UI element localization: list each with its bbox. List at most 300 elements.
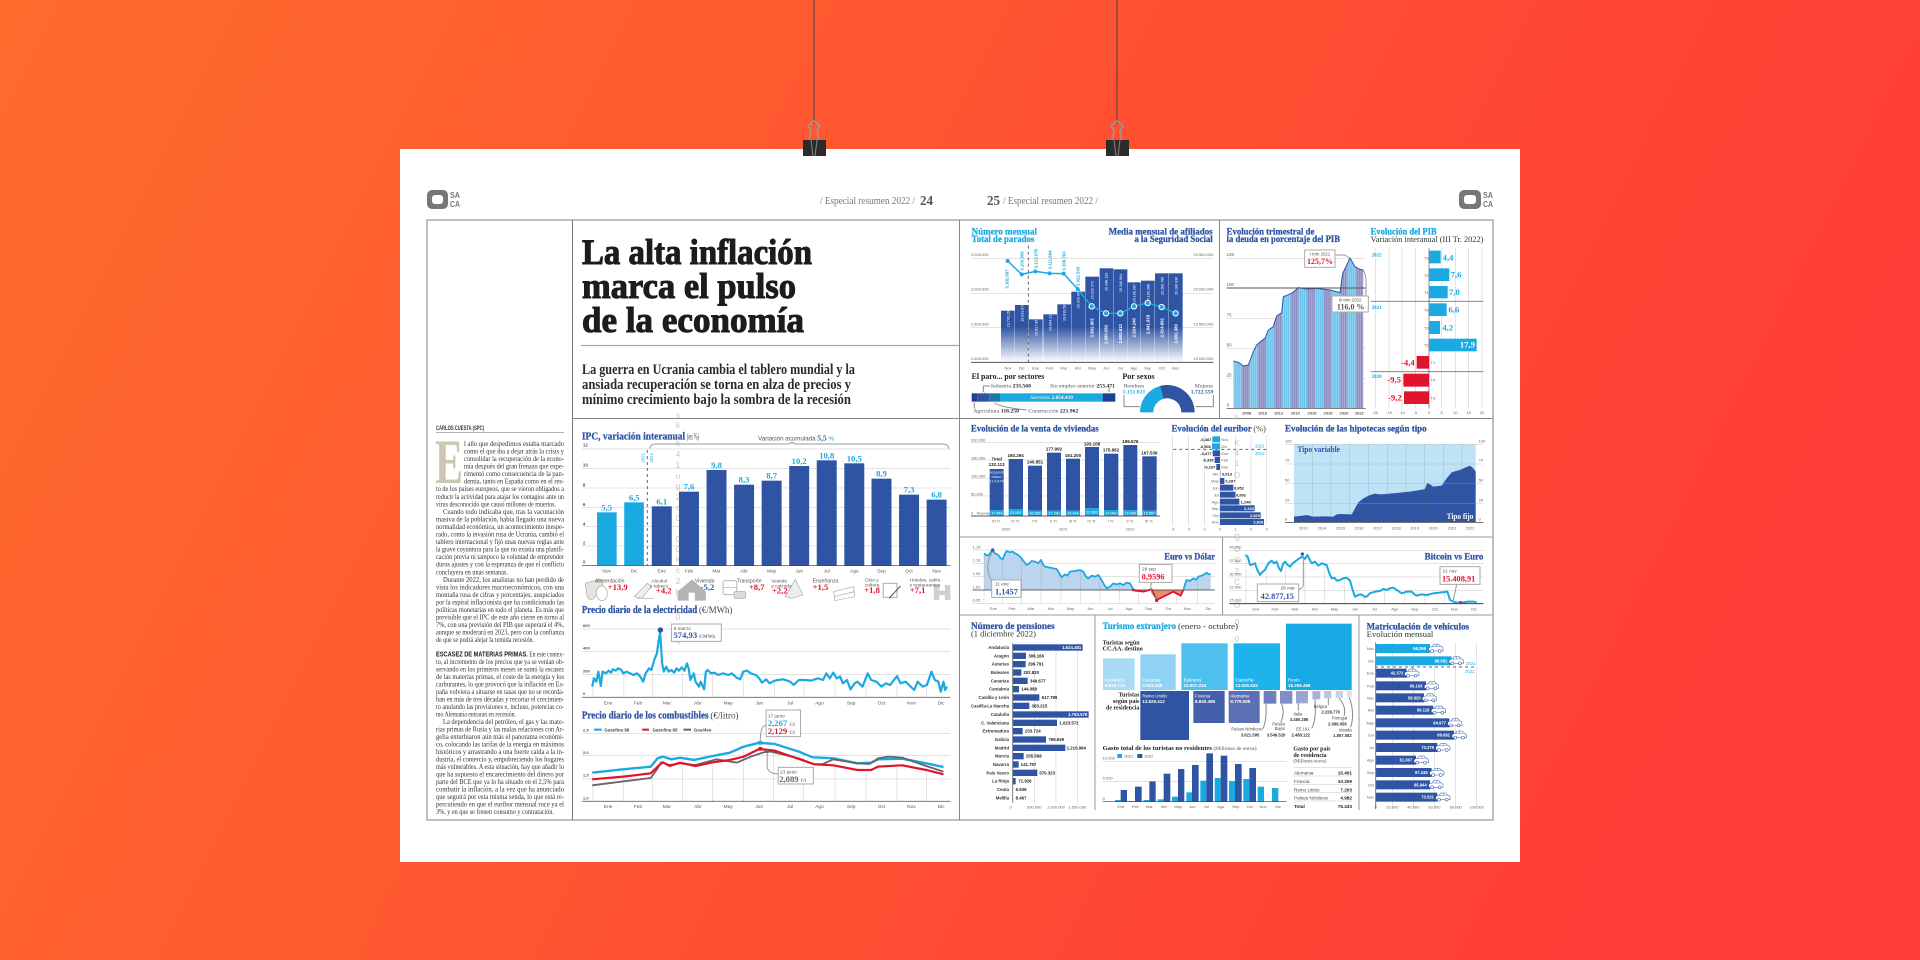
bar chart: PIB: 2020	[1372, 375, 1382, 380]
chart: bitcoin vs euro: Dic	[1471, 606, 1477, 611]
month labels: Jun	[1103, 365, 1110, 370]
heading: pensiones: Número de pensiones	[971, 622, 1055, 632]
callout: 17 junio	[759, 710, 801, 751]
line values: parados: 2.941.919	[1145, 314, 1150, 334]
bar values: afiliados: 20.020.000	[1076, 290, 1080, 308]
subtitle	[582, 362, 856, 408]
treemap: país de residencia: Francia	[1195, 693, 1210, 698]
article text	[436, 439, 565, 816]
month labels: Ene	[1367, 671, 1375, 676]
chart: euro vs dólar: 1,15	[973, 544, 981, 549]
line values: parados: 3.123.078	[1033, 248, 1038, 268]
treemap: país de residencia: 2.096.056	[1328, 721, 1347, 726]
heading: PIB	[1371, 226, 1483, 244]
bar chart: PIB: 2021	[1372, 306, 1382, 311]
fuel grid and labels: 2,0	[583, 750, 589, 755]
bar chart: viviendas: mano	[992, 474, 1002, 479]
chart: paro por sexos: 1.722.559	[1191, 390, 1214, 396]
chart: euro vs dólar: Jul	[1107, 606, 1113, 611]
fuel grid and labels: Dic	[938, 804, 945, 810]
month labels: Oct	[1159, 365, 1166, 370]
treemap: CCAA destino: 9.923.288	[1142, 683, 1163, 688]
stray letter columns: k	[676, 439, 681, 448]
byline: CARLOS CUESTA (SPC)	[436, 425, 484, 432]
bar values: 66.399	[1413, 646, 1427, 651]
area chart: hipotecas: 2020	[1429, 525, 1439, 530]
line values: parados: 2.902.901	[1089, 317, 1094, 337]
article text: políticas monetarias en todo el planeta. Es más que	[436, 605, 565, 614]
month labels: Feb	[1046, 365, 1054, 370]
callout: III trim 2022: III trim 2022	[1339, 297, 1362, 302]
bar chart: euríbor: Nov	[1221, 437, 1228, 442]
axis labels: 1.500.000	[1068, 805, 1087, 810]
bar chart: euríbor: 2022	[1255, 451, 1265, 456]
treemap: país de residencia: EE.UU.	[1296, 727, 1310, 732]
bar values: 84.977	[1433, 720, 1447, 725]
bar values: afiliados: 19.627.851	[1034, 318, 1038, 336]
panel: combustibles	[582, 710, 950, 810]
chart: euro vs dólar: Ene	[990, 606, 998, 611]
bar chart: viviendas	[971, 438, 1160, 531]
article text: previsible que el IPC de este año cierre en torno al	[436, 613, 564, 622]
pension values: 617.789	[1042, 695, 1058, 700]
fuel grid and labels: Oct	[878, 804, 886, 810]
area chart: deuda: 125	[1227, 252, 1234, 257]
chart: bitcoin vs euro: Nov	[1451, 606, 1458, 611]
article text: normalidad económica, un acontecimiento inespe-	[436, 522, 564, 531]
region labels	[971, 645, 1010, 800]
icon: hoteles: y restaurantes	[910, 583, 941, 589]
drop cap: E	[435, 426, 463, 497]
stray letter columns: O	[1234, 471, 1240, 480]
area chart: hipotecas: 2017	[1373, 525, 1383, 530]
month labels: Jul	[1118, 365, 1123, 370]
panel: pensiones: 1.624.481	[1062, 645, 1082, 650]
grid and axes	[971, 252, 1214, 362]
bar values: 42.372	[1391, 671, 1404, 676]
area chart: deuda: 100	[1227, 282, 1234, 287]
bar chart: gasto total: (Millones de euros)	[1213, 745, 1257, 752]
region labels: Ceuta	[997, 787, 1010, 792]
fuel grid and labels: Sep	[847, 804, 856, 810]
title: de la economía	[582, 300, 804, 340]
icon: hoteles: Hoteles, cafés	[910, 578, 941, 584]
bar chart: euríbor: -0,237	[1204, 465, 1216, 470]
callout: 23 junio: 23 junio	[780, 770, 797, 776]
icon row: CPI components	[585, 578, 950, 601]
pension values: 349.677	[1030, 678, 1046, 683]
bar chart: PIB: T2	[1424, 273, 1429, 278]
month labels	[1366, 646, 1375, 800]
axis labels: 40.000	[1407, 805, 1420, 810]
bar chart: gasto total	[1103, 745, 1287, 809]
bar chart: viviendas: 2021	[1059, 526, 1069, 531]
stray letter columns: C	[1234, 578, 1240, 587]
panel: turismo	[1103, 621, 1353, 809]
bar chart: viviendas: 167.539	[1141, 450, 1158, 455]
region labels: Asturias	[992, 662, 1010, 667]
chart: euro vs dólar	[973, 544, 1215, 611]
bar values: afiliados: 20.158.087	[1133, 284, 1137, 302]
bar values: 9,8	[711, 460, 722, 470]
callout: bitcoin máximo: 28 mar	[1280, 586, 1295, 591]
article text: rimentó como consecuencia de la pan-	[464, 469, 564, 478]
fuel grid and labels: 1,0	[583, 795, 589, 800]
stray letter columns: k	[676, 421, 681, 430]
y axis and grid: 8	[583, 483, 586, 488]
table: gasto por país: 15.401	[1338, 771, 1352, 776]
icon: alimentación	[585, 578, 628, 601]
heading: bitcoin: Bitcoin vs Euro	[1425, 551, 1484, 561]
region labels: Andalucía	[988, 645, 1010, 650]
article text: de que se podrá alejar la temida recesión.	[436, 635, 534, 644]
bar chart: viviendas: 16.065	[1029, 512, 1041, 516]
area chart: hipotecas: 25	[1285, 497, 1290, 502]
bar chart: viviendas: IV Tr.	[1087, 518, 1097, 523]
bar chart: gasto total: Gasto total de los turistas no residentes	[1103, 746, 1213, 752]
stray letter columns: c	[676, 503, 680, 512]
axis labels: 1.000.000	[1047, 805, 1066, 810]
icon: vivienda	[678, 578, 715, 601]
treemap: país de residencia: Irlanda	[1339, 727, 1352, 732]
bar chart: gasto total: Jul	[1204, 804, 1209, 809]
area chart: hipotecas: 2019	[1410, 525, 1420, 530]
chart: bitcoin vs euro: 37.500	[1229, 558, 1242, 563]
bar chart: viviendas: 2020	[1002, 526, 1011, 531]
bar values: afiliados: 20.286.836	[1174, 277, 1178, 295]
article text: reducir la actividad para atajar los contagios ante un	[436, 492, 564, 501]
article text: gelia enturbiaron aún más el panorama económi-	[436, 732, 564, 741]
chart: euro vs dólar: May	[1067, 606, 1074, 611]
month labels: Dic	[1019, 365, 1025, 370]
bar chart: PIB: T4	[1431, 378, 1436, 383]
bar values: 8,3	[739, 475, 749, 485]
article text: combatir la inflación, a la vez que ha anunciado	[436, 784, 564, 794]
bar chart: euríbor	[1171, 436, 1269, 532]
grid and axes: 3.000.000	[971, 287, 990, 292]
heading: viviendas: Evolución de la venta de viviendas	[971, 424, 1099, 434]
month labels: Ago	[850, 569, 859, 575]
bar chart: viviendas: 17.993	[1105, 511, 1117, 515]
callout: electricity peak: 574,93 €/MWh	[673, 630, 715, 640]
bar chart: gasto total: 5.000	[1103, 776, 1113, 781]
stray letter columns: 0	[1235, 635, 1240, 644]
bar chart: gasto total: Mar	[1146, 804, 1153, 809]
bar chart: PIB: T3	[1424, 325, 1429, 330]
bar chart: euríbor: May	[1211, 479, 1219, 484]
bar values: 8,7	[766, 471, 778, 481]
bar chart: PIB: 15	[1466, 410, 1472, 415]
electricity grid and labels: May	[724, 701, 733, 707]
treemap: país de residencia: 3.480.286	[1290, 717, 1309, 722]
icon: ocio y cultura: cultura	[865, 583, 880, 589]
heading: pensiones: (1 diciembre 2022)	[971, 629, 1036, 639]
month labels: Mar	[1061, 365, 1068, 370]
table: gasto por país: Países Nórdicos	[1294, 796, 1329, 801]
bar values: 60.103	[1410, 683, 1423, 688]
fuel grid and labels	[582, 727, 950, 810]
area chart: hipotecas: 100	[1285, 438, 1292, 443]
stray letter columns: O	[1234, 545, 1240, 554]
pension values: 308.166	[1028, 653, 1045, 658]
legend: years	[1117, 754, 1154, 759]
month labels: Sep	[877, 569, 886, 575]
region labels: Madrid	[995, 745, 1009, 750]
area chart: hipotecas: 2014	[1318, 525, 1327, 530]
bar chart: gasto total: Ene	[1117, 804, 1125, 809]
electricity grid and labels: Mar	[663, 701, 672, 707]
bar chart: euríbor: 0,287	[1225, 479, 1236, 484]
icon: vivienda: Vivienda	[695, 578, 715, 584]
bar chart: PIB: 7,6	[1451, 269, 1462, 279]
page frame and dividers	[427, 220, 1493, 820]
y axis and grid	[582, 443, 950, 566]
area chart: hipotecas	[1285, 438, 1486, 530]
article text: que seguirá por esta misma senda, lo que está re-	[436, 792, 564, 801]
article text: aunque se moderará en 2023, pero con la confianza	[436, 628, 565, 637]
month labels: Abr	[740, 569, 748, 575]
bar chart: viviendas: 22.883	[1086, 511, 1098, 515]
electricity grid and labels: Jul	[787, 701, 793, 707]
area chart: hipotecas: 2013	[1299, 525, 1309, 530]
chart: bitcoin vs euro: 15.000	[1229, 598, 1242, 603]
bar chart: PIB: 4,4	[1443, 252, 1454, 262]
page header left: 24	[920, 194, 933, 209]
stray letter columns: 0	[676, 545, 681, 554]
region labels: Cantabria	[989, 687, 1010, 692]
subtitle: ansiada recuperación se torna en alza de precios y	[582, 377, 852, 393]
month labels: Ene	[1032, 365, 1040, 370]
panel: IPC: (en %)	[687, 431, 699, 442]
callout: I trim 2021	[1305, 250, 1349, 267]
bar chart: euríbor: -1	[1203, 527, 1207, 532]
electricity grid and labels: Dic	[938, 701, 945, 707]
bar values: afiliados: 20.180.388	[1146, 284, 1150, 302]
heading: media mensual: Media mensual de afiliados	[1109, 226, 1213, 236]
bar chart: PIB: 0	[1428, 410, 1431, 415]
region labels: Melilla	[996, 795, 1010, 800]
grid	[1034, 643, 1077, 803]
stray letter columns: h	[676, 588, 680, 597]
stray letter columns: 2	[676, 493, 681, 502]
line chart: parados	[1006, 259, 1178, 316]
table: gasto por país: Reino Unido	[1294, 787, 1320, 792]
treemap: país de residencia: 2.488.122	[1291, 733, 1311, 738]
area chart: hipotecas: 100	[1479, 438, 1486, 443]
month labels: Abr	[1075, 365, 1082, 370]
axis labels: 80.000	[1450, 805, 1463, 810]
bar chart: viviendas: 132.113	[989, 462, 1005, 467]
bar chart: viviendas: 175.882	[1103, 448, 1120, 453]
article text: rado, como la invasión rusa de Ucrania, cambió el	[436, 530, 564, 538]
area chart: deuda: 25	[1227, 373, 1232, 378]
bar chart: euríbor: 2	[1250, 527, 1253, 532]
area chart: hipotecas: Tipo variable	[1297, 445, 1340, 454]
bar values: afiliados: 20.348.133	[1105, 273, 1109, 291]
bar values	[601, 450, 942, 512]
y axis and grid: 10	[583, 462, 588, 467]
treemap: país de residencia: Turistas	[1119, 693, 1140, 699]
chart: paro por sexos	[1122, 372, 1214, 412]
callout: 23 junio	[765, 750, 813, 784]
bar chart: gasto total: Jun	[1189, 804, 1196, 809]
bar values: 51.907	[1400, 758, 1413, 763]
region labels: Navarra	[993, 762, 1010, 767]
chart: euro vs dólar: 1,00	[973, 584, 981, 589]
treemap: CCAA destino: 18.256.499	[1288, 683, 1311, 688]
chart: euro vs dólar: Feb	[1009, 606, 1016, 611]
electricity grid and labels: Nov	[907, 701, 916, 707]
article text: dustria, el comercio y, empobreciendo los hogares	[436, 754, 564, 764]
article text: paña volviera a situarse en tasas que no se recorda-	[436, 687, 564, 696]
title: La alta inflación	[582, 232, 812, 272]
chart: bitcoin vs euro: Jul	[1372, 606, 1377, 611]
bar values: afiliados: 19.743.268	[1006, 309, 1010, 327]
month labels: Nov	[1367, 795, 1374, 800]
chart: euro vs dólar: Ago	[1125, 606, 1133, 611]
callout: I trim 2021: I trim 2021	[1310, 251, 1331, 256]
bar chart: viviendas: Segunda	[989, 470, 1005, 475]
area chart: hipotecas: 50	[1285, 478, 1290, 483]
treemap: país de residencia: 13.529.412	[1142, 699, 1165, 704]
bar values: 7,3	[904, 485, 914, 495]
chart: bitcoin vs euro: 45.000	[1229, 545, 1242, 550]
area chart: hipotecas: 0	[1479, 517, 1482, 522]
bar chart: euríbor: Jul	[1214, 492, 1219, 497]
bar chart: euríbor: Feb	[1221, 458, 1229, 463]
callout: 17 junio: 17 junio	[768, 713, 785, 719]
bar chart: PIB	[1371, 248, 1485, 415]
callout: bitcoin mínimo: 21 nov	[1443, 568, 1457, 573]
y axis and grid: 6	[583, 502, 586, 507]
pension values: 144.089	[1021, 687, 1038, 692]
bar values: 10,2	[792, 456, 807, 466]
fuel grid and labels: 1,5	[583, 773, 589, 778]
month labels	[1004, 365, 1179, 370]
icon: alcohol y tabaco: Alcohol	[651, 578, 667, 584]
callout: III trim 2022: 116,0 %	[1337, 303, 1364, 312]
article text: cación previa ni tampoco la voluntad de emprender	[436, 552, 564, 561]
region labels: C. Valenciana	[981, 720, 1010, 725]
treemap: CCAA destino: 6.818.714	[1105, 683, 1125, 688]
legend: fuels: Gasóleo	[694, 727, 712, 732]
callout: 23 junio: 2,089 €/l	[779, 774, 807, 784]
bar chart: euríbor: Ene	[1221, 451, 1229, 456]
article text: vista los indicadores macroeconómicos, con una	[436, 582, 565, 591]
heading: número mensual: Número mensual	[972, 226, 1037, 236]
chart: bitcoin vs euro: Abr	[1312, 606, 1319, 611]
icon: alimentación: Alimentación	[595, 578, 625, 584]
y axis and grid: 2	[583, 540, 586, 545]
article text: consolidar la recuperación de la econo-	[464, 454, 564, 463]
white paper sheet	[400, 149, 1520, 862]
month labels: Nov	[1367, 646, 1374, 651]
article text: mo Alemania entraran en recesión.	[436, 710, 516, 718]
line values: parados: 2.924.240	[1132, 317, 1137, 337]
chart: bitcoin vs euro: Mar	[1292, 606, 1299, 611]
bars: afiliados	[1001, 268, 1183, 362]
pension values: 1.023.572	[1059, 720, 1079, 725]
bar chart: matriculaciones	[1376, 644, 1454, 802]
grid and axes: 19.000.000	[1193, 356, 1214, 361]
grid and axes: 2.800.000	[971, 321, 990, 326]
bar chart: viviendas: 160.294	[1008, 453, 1024, 458]
electricity grid and labels: 200	[583, 668, 591, 673]
month labels: Feb	[685, 569, 693, 575]
heading: deuda: la deuda en porcentaje del PIB	[1227, 234, 1340, 244]
bar chart: euríbor: Jun	[1212, 485, 1219, 490]
bar chart: viviendas: IV Tr.	[1011, 518, 1020, 523]
bar chart: viviendas: 17.454	[991, 511, 1002, 515]
treemap: país de residencia: Reino Unido	[1142, 693, 1168, 698]
panel: vivienda, euríbor, euro	[971, 424, 1269, 611]
electricity grid and labels: Feb	[634, 701, 643, 707]
callout: electricity peak	[658, 624, 721, 641]
heading: euro vs dólar: Euro vs Dólar	[1164, 551, 1215, 561]
pension values: 6.938	[1016, 787, 1027, 792]
article text: mía después del gran frenazo que expe-	[464, 462, 564, 471]
chart: euro vs dólar: Nov	[1184, 606, 1191, 611]
page header right: 25	[987, 194, 1000, 209]
bar chart: euríbor: 2,629	[1250, 513, 1261, 518]
legend: fuels: Gasolina 95	[652, 727, 678, 732]
bar chart: PIB: -9,5	[1387, 375, 1402, 385]
region labels: Extremadura	[983, 729, 1010, 734]
bar values: afiliados: 20.340.964	[1119, 274, 1123, 292]
chart: bitcoin vs euro: Oct	[1432, 606, 1439, 611]
treemap: CCAA destino: 13.025.932	[1235, 683, 1258, 688]
stacked bar: paro por sectores: Agricultura 118.250	[973, 408, 1019, 414]
bar chart: PIB: T3	[1424, 255, 1429, 260]
treemap: país de residencia: 1.857.082	[1333, 733, 1352, 738]
bar chart: euríbor: Dic	[1221, 444, 1227, 449]
bar values	[1391, 646, 1451, 800]
electricity grid and labels: Oct	[878, 701, 886, 707]
article text: de las materias primas, el coste de la energía y los	[436, 672, 564, 681]
region labels: Canarias	[991, 678, 1010, 683]
bar chart: viviendas: 16.424	[1067, 512, 1079, 516]
bar chart: euríbor: 0,852	[1234, 485, 1245, 490]
treemap: país de residencia: según país	[1113, 699, 1140, 705]
bar values: afiliados: 19.819.583	[1063, 303, 1067, 321]
icon: vivienda: -5,2	[701, 582, 714, 592]
axis labels	[1375, 805, 1485, 810]
bar chart: viviendas: 17.230	[1048, 512, 1060, 516]
icon: transporte: +8,7	[749, 582, 765, 592]
page header right: / Especial resumen 2022 /	[1003, 196, 1098, 207]
line values: parados: 3.022.503	[1075, 266, 1080, 286]
area chart: deuda: 2010	[1258, 411, 1268, 416]
bar chart: euríbor: Oct	[1212, 513, 1220, 518]
bar values: 73.321	[1421, 795, 1435, 800]
treemap: país de residencia: Países	[1272, 721, 1285, 726]
chart: paro por sexos: 1.151.821	[1123, 390, 1145, 396]
icon: transporte: Transporte	[737, 578, 762, 584]
bar chart: gasto total: Oct	[1247, 804, 1254, 809]
month labels: Nov	[1004, 365, 1012, 370]
axis labels: 0	[1010, 805, 1013, 810]
chart: euro vs dólar: 1,05	[973, 571, 981, 576]
bar chart: viviendas: 177.992	[1046, 447, 1063, 452]
stacked bar: paro por sectores: Sin empleo anterior 253.471	[1050, 383, 1115, 389]
bar values: 89.892	[1437, 733, 1451, 738]
line: gasóleo	[592, 751, 943, 785]
chart: euro vs dólar: Oct	[1165, 606, 1172, 611]
stray letter columns: o	[676, 472, 681, 481]
heading: matriculación: Evolución mensual	[1367, 629, 1434, 639]
fuel grid and labels: Abr	[694, 804, 702, 810]
stray letter columns: 0	[676, 613, 681, 622]
